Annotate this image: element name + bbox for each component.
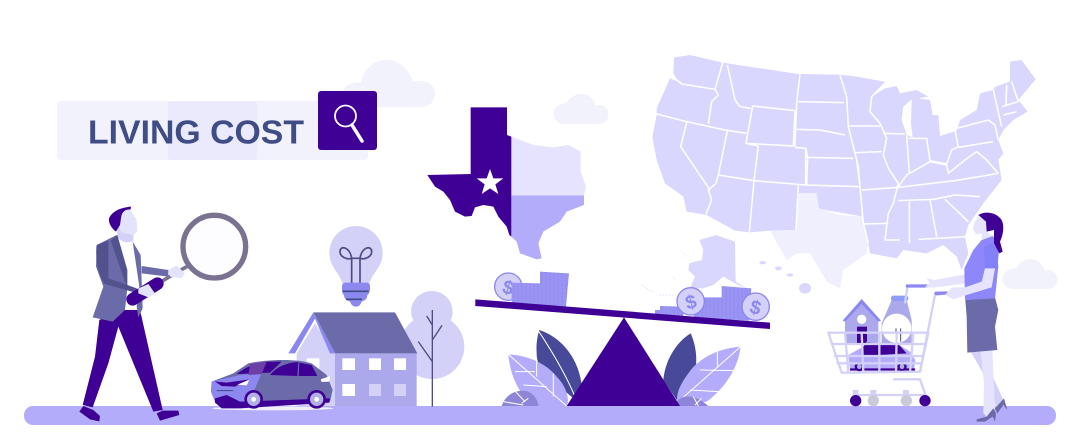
man with magnifying glass <box>79 207 246 421</box>
Texas lower band <box>511 195 584 259</box>
car <box>211 360 333 410</box>
title: LIVING COST <box>88 114 304 150</box>
contiguous states <box>652 55 1036 270</box>
left coin stacks <box>512 272 569 307</box>
cloud: top left <box>342 60 435 107</box>
star <box>477 169 503 194</box>
Texas upper band <box>511 137 586 195</box>
Texas on the map <box>770 194 868 288</box>
tree crown <box>400 291 464 379</box>
right leaves <box>663 333 741 406</box>
balance scale with coins <box>475 272 770 406</box>
right rear coin <box>742 293 769 320</box>
top <box>964 236 998 300</box>
magnifier grip <box>133 284 157 299</box>
woman with shopping cart <box>828 213 1007 422</box>
high heels <box>977 398 1007 422</box>
man, house, bulb and car <box>79 207 417 421</box>
icon: search magnifier <box>335 106 362 141</box>
far arm <box>925 274 967 287</box>
cart contents <box>843 296 915 371</box>
map of the United States <box>642 55 1036 295</box>
left coin <box>495 273 522 300</box>
magnifying glass <box>183 215 246 278</box>
near arm <box>945 268 995 299</box>
hands <box>138 265 185 297</box>
Texas flag icon <box>427 107 586 259</box>
search bar with title <box>57 91 377 160</box>
woman <box>925 213 1007 422</box>
tree <box>400 291 464 407</box>
ground bar <box>24 406 1056 425</box>
magnifier handle <box>160 266 188 282</box>
fulcrum <box>567 317 680 406</box>
cart frame <box>828 287 947 397</box>
neck <box>117 227 133 242</box>
right coin stacks <box>693 286 751 321</box>
right front dollar sign: $ <box>683 292 699 315</box>
cart handles <box>907 286 947 293</box>
cloud: centre <box>553 94 608 124</box>
state borders <box>657 63 1018 243</box>
left coin dollar sign: $ <box>500 277 516 300</box>
far arm <box>142 266 168 277</box>
Aleutian islands <box>642 253 687 295</box>
search bar background <box>57 101 368 160</box>
trousers <box>83 307 163 412</box>
Alaska <box>688 235 747 288</box>
front leg <box>981 350 995 417</box>
Hawaii <box>759 261 811 294</box>
jacket <box>93 235 143 322</box>
shoes <box>79 406 179 421</box>
skirt <box>965 297 998 353</box>
hair <box>978 213 1003 253</box>
right rear dollar sign: $ <box>747 297 763 320</box>
neck and face <box>973 217 993 240</box>
shirt <box>117 240 140 310</box>
sleeve <box>984 243 999 268</box>
head and hair <box>117 209 137 235</box>
search button <box>318 91 377 150</box>
Lake Michigan <box>902 99 913 137</box>
Texas purple band <box>427 107 511 237</box>
tree trunk <box>418 310 442 407</box>
right small coin stack <box>655 306 683 316</box>
cloud: right <box>1002 259 1058 289</box>
house <box>288 312 417 406</box>
light bulb icon <box>329 226 383 307</box>
left leaves <box>502 330 582 406</box>
right front coin <box>677 288 704 315</box>
cart wheels <box>850 395 931 406</box>
search bar highlight <box>168 101 257 160</box>
back leg <box>971 352 1003 408</box>
beam <box>475 299 770 329</box>
